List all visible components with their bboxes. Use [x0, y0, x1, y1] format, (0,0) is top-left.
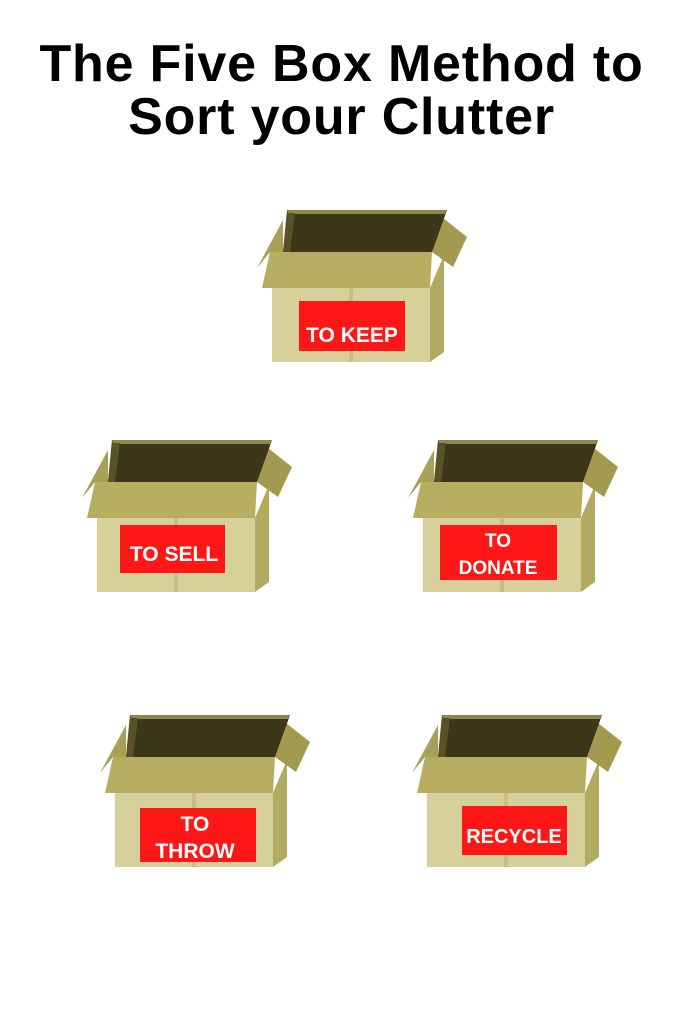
box: to throw: TO	[181, 813, 209, 836]
title: The Five Box Method to	[39, 35, 644, 93]
title: Sort your Clutter	[128, 88, 555, 146]
box: to donate: DONATE	[459, 558, 537, 579]
box: to throw: THROW	[155, 840, 235, 863]
box: to donate	[408, 440, 618, 592]
box: to throw	[100, 715, 310, 867]
box: recycle: RECYCLE	[466, 826, 562, 848]
box: to keep	[257, 210, 467, 362]
title	[39, 35, 644, 146]
box: to sell: TO SELL	[130, 543, 218, 566]
box: recycle	[412, 715, 622, 867]
box: to keep: TO KEEP	[306, 324, 398, 347]
box: to donate: TO	[485, 531, 511, 552]
box: to sell	[82, 440, 292, 592]
